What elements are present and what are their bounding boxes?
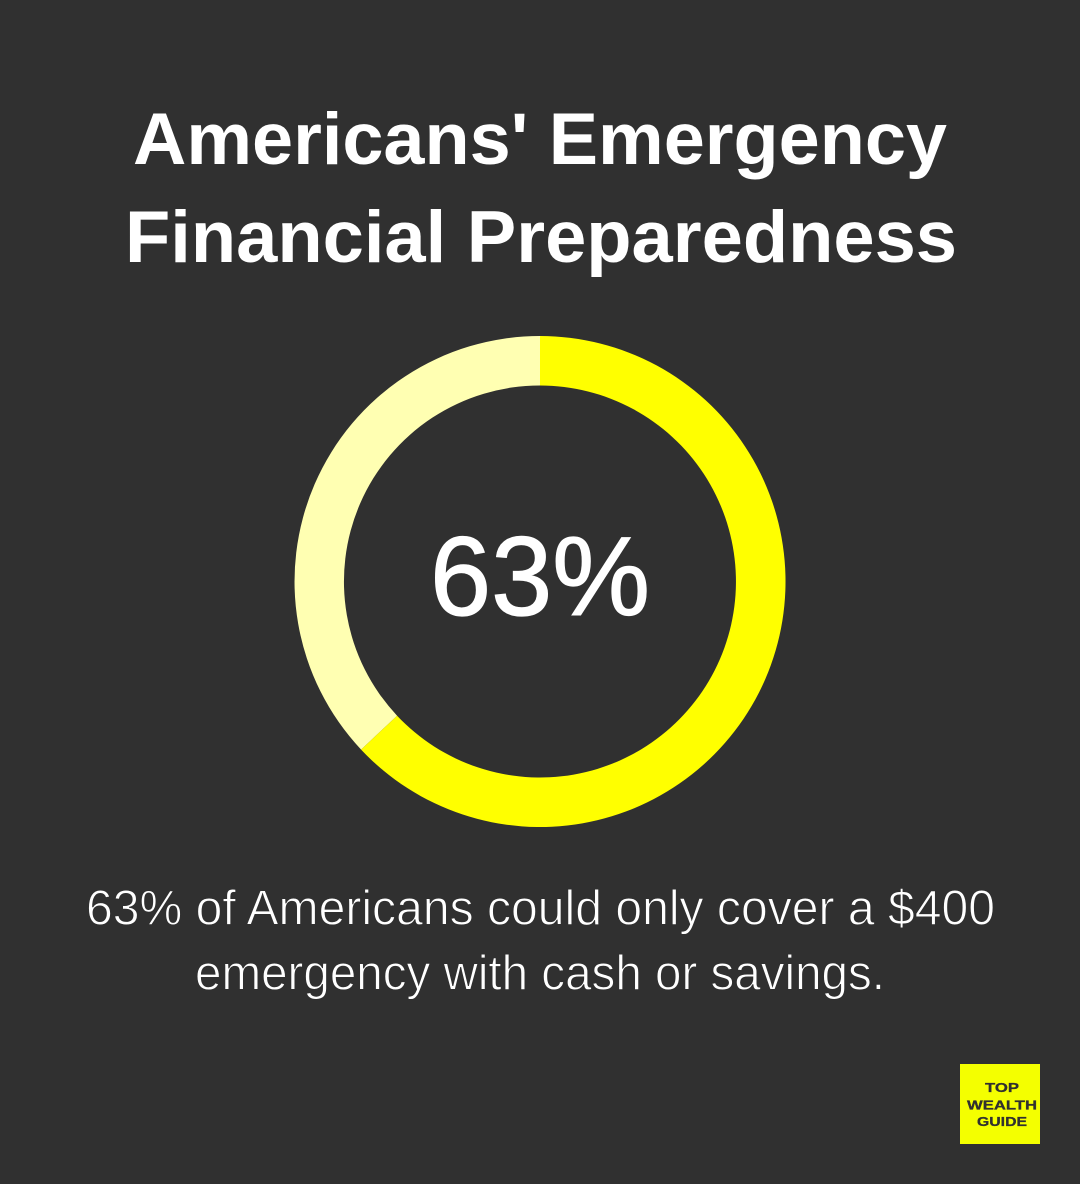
donut chart: 63% — [295, 336, 786, 827]
description text: 63% of Americans could only cover a $400 — [86, 882, 995, 936]
logo badge: GUIDE — [977, 1114, 1027, 1129]
center value: 63% — [430, 514, 650, 639]
title: Americans' Emergency — [133, 99, 947, 180]
logo badge — [960, 1064, 1040, 1144]
title: Financial Preparedness — [125, 197, 957, 278]
logo badge: WEALTH — [967, 1098, 1037, 1112]
logo badge: TOP — [985, 1080, 1019, 1095]
title — [125, 99, 957, 278]
description text: emergency with cash or savings. — [195, 946, 885, 1000]
remaining segment: 37% — [295, 336, 540, 750]
highlighted segment: 63% — [361, 336, 786, 827]
description text — [86, 882, 995, 1000]
